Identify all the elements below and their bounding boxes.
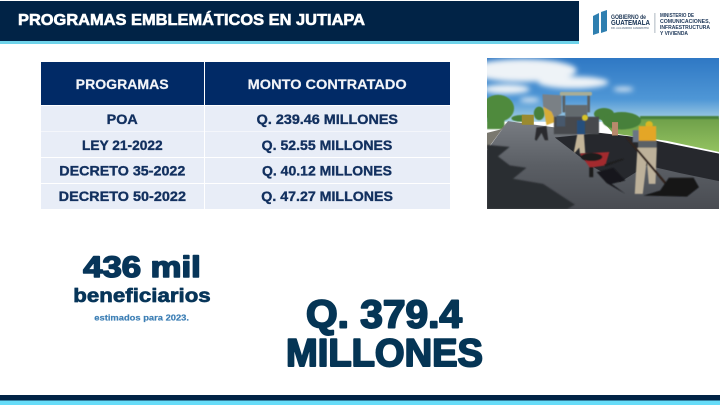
worker: blue shirt: [574, 115, 588, 154]
stat: total amount: [286, 294, 483, 375]
logo: Gobierno de Guatemala and ministry: MINISTERIO DE: [660, 13, 694, 19]
row: POA: [41, 106, 450, 132]
header banner: [0, 1, 579, 44]
clouds: [470, 59, 633, 102]
row: POA: POA: [107, 112, 138, 127]
row: Ley 21-2022: Q. 52.55 MILLONES: [262, 138, 392, 153]
label: beneficiarios: [73, 285, 211, 307]
left trees: [482, 95, 514, 129]
row: Decreto 35-2022: Q. 40.12 MILLONES: [262, 164, 392, 178]
logo: Gobierno de Guatemala and ministry: COMUNICACIONES,: [660, 19, 711, 25]
left shoulder: [487, 121, 508, 150]
distant tree line: [511, 107, 719, 129]
wheelbarrow: [580, 152, 624, 177]
note: estimados para 2023.: [94, 314, 189, 322]
logo: Gobierno de Guatemala and ministry: GOBIERNO de: [611, 15, 647, 21]
table header row: MONTO CONTRATADO: [248, 77, 407, 92]
footer band: [0, 395, 720, 405]
distant yellow truck: [522, 115, 534, 125]
stat: total amount: Q. 379.4: [306, 294, 463, 336]
photo: road paving crew: [487, 58, 719, 209]
logo: Gobierno de Guatemala and ministry: Y VIVIENDA: [660, 31, 688, 37]
worker: far right: [612, 122, 618, 136]
stat: total amount: MILLONES: [286, 332, 483, 375]
stat: 436 mil beneficiarios: [73, 251, 211, 322]
row: Decreto 50-2022: DECRETO 50-2022: [59, 189, 186, 204]
row: Decreto 50-2022: Q. 47.27 MILLONES: [261, 189, 393, 204]
row: Ley 21-2022: [41, 132, 450, 157]
worker: distant by machine: [535, 116, 565, 141]
big number: 436 mil: [83, 251, 201, 284]
row: Decreto 35-2022: [41, 158, 450, 183]
row: Decreto 50-2022: [41, 184, 450, 209]
row: POA: Q. 239.46 MILLONES: [257, 112, 398, 127]
logo: Gobierno de Guatemala and ministry: [593, 10, 711, 37]
table header row: [41, 62, 450, 105]
logo: Gobierno de Guatemala and ministry: INFRAESTRUCTURA: [660, 25, 710, 31]
table header row: PROGRAMAS: [76, 77, 169, 92]
grass field: [600, 118, 719, 152]
logo: Gobierno de Guatemala and ministry: DR. ALEJANDRO GIAMMATTEI: [611, 26, 649, 30]
wheelbarrow shadow: [597, 168, 625, 194]
tree shadows: [487, 145, 575, 209]
logo: Gobierno de Guatemala and ministry: GUATEMALA: [611, 20, 650, 27]
fresh asphalt: [555, 133, 719, 182]
icon: flag bars: [593, 10, 607, 35]
paving machine: [542, 92, 599, 134]
title: PROGRAMAS EMBLEMÁTICOS EN JUTIAPA: [18, 10, 365, 29]
row: Ley 21-2022: LEY 21-2022: [82, 138, 163, 153]
worker shadow: [643, 178, 699, 197]
road surface: [487, 121, 719, 209]
row: Decreto 35-2022: DECRETO 35-2022: [59, 164, 185, 178]
table: programas y monto contratado: [41, 62, 450, 209]
worker: yellow vest: [625, 121, 668, 194]
sky: [487, 58, 719, 122]
